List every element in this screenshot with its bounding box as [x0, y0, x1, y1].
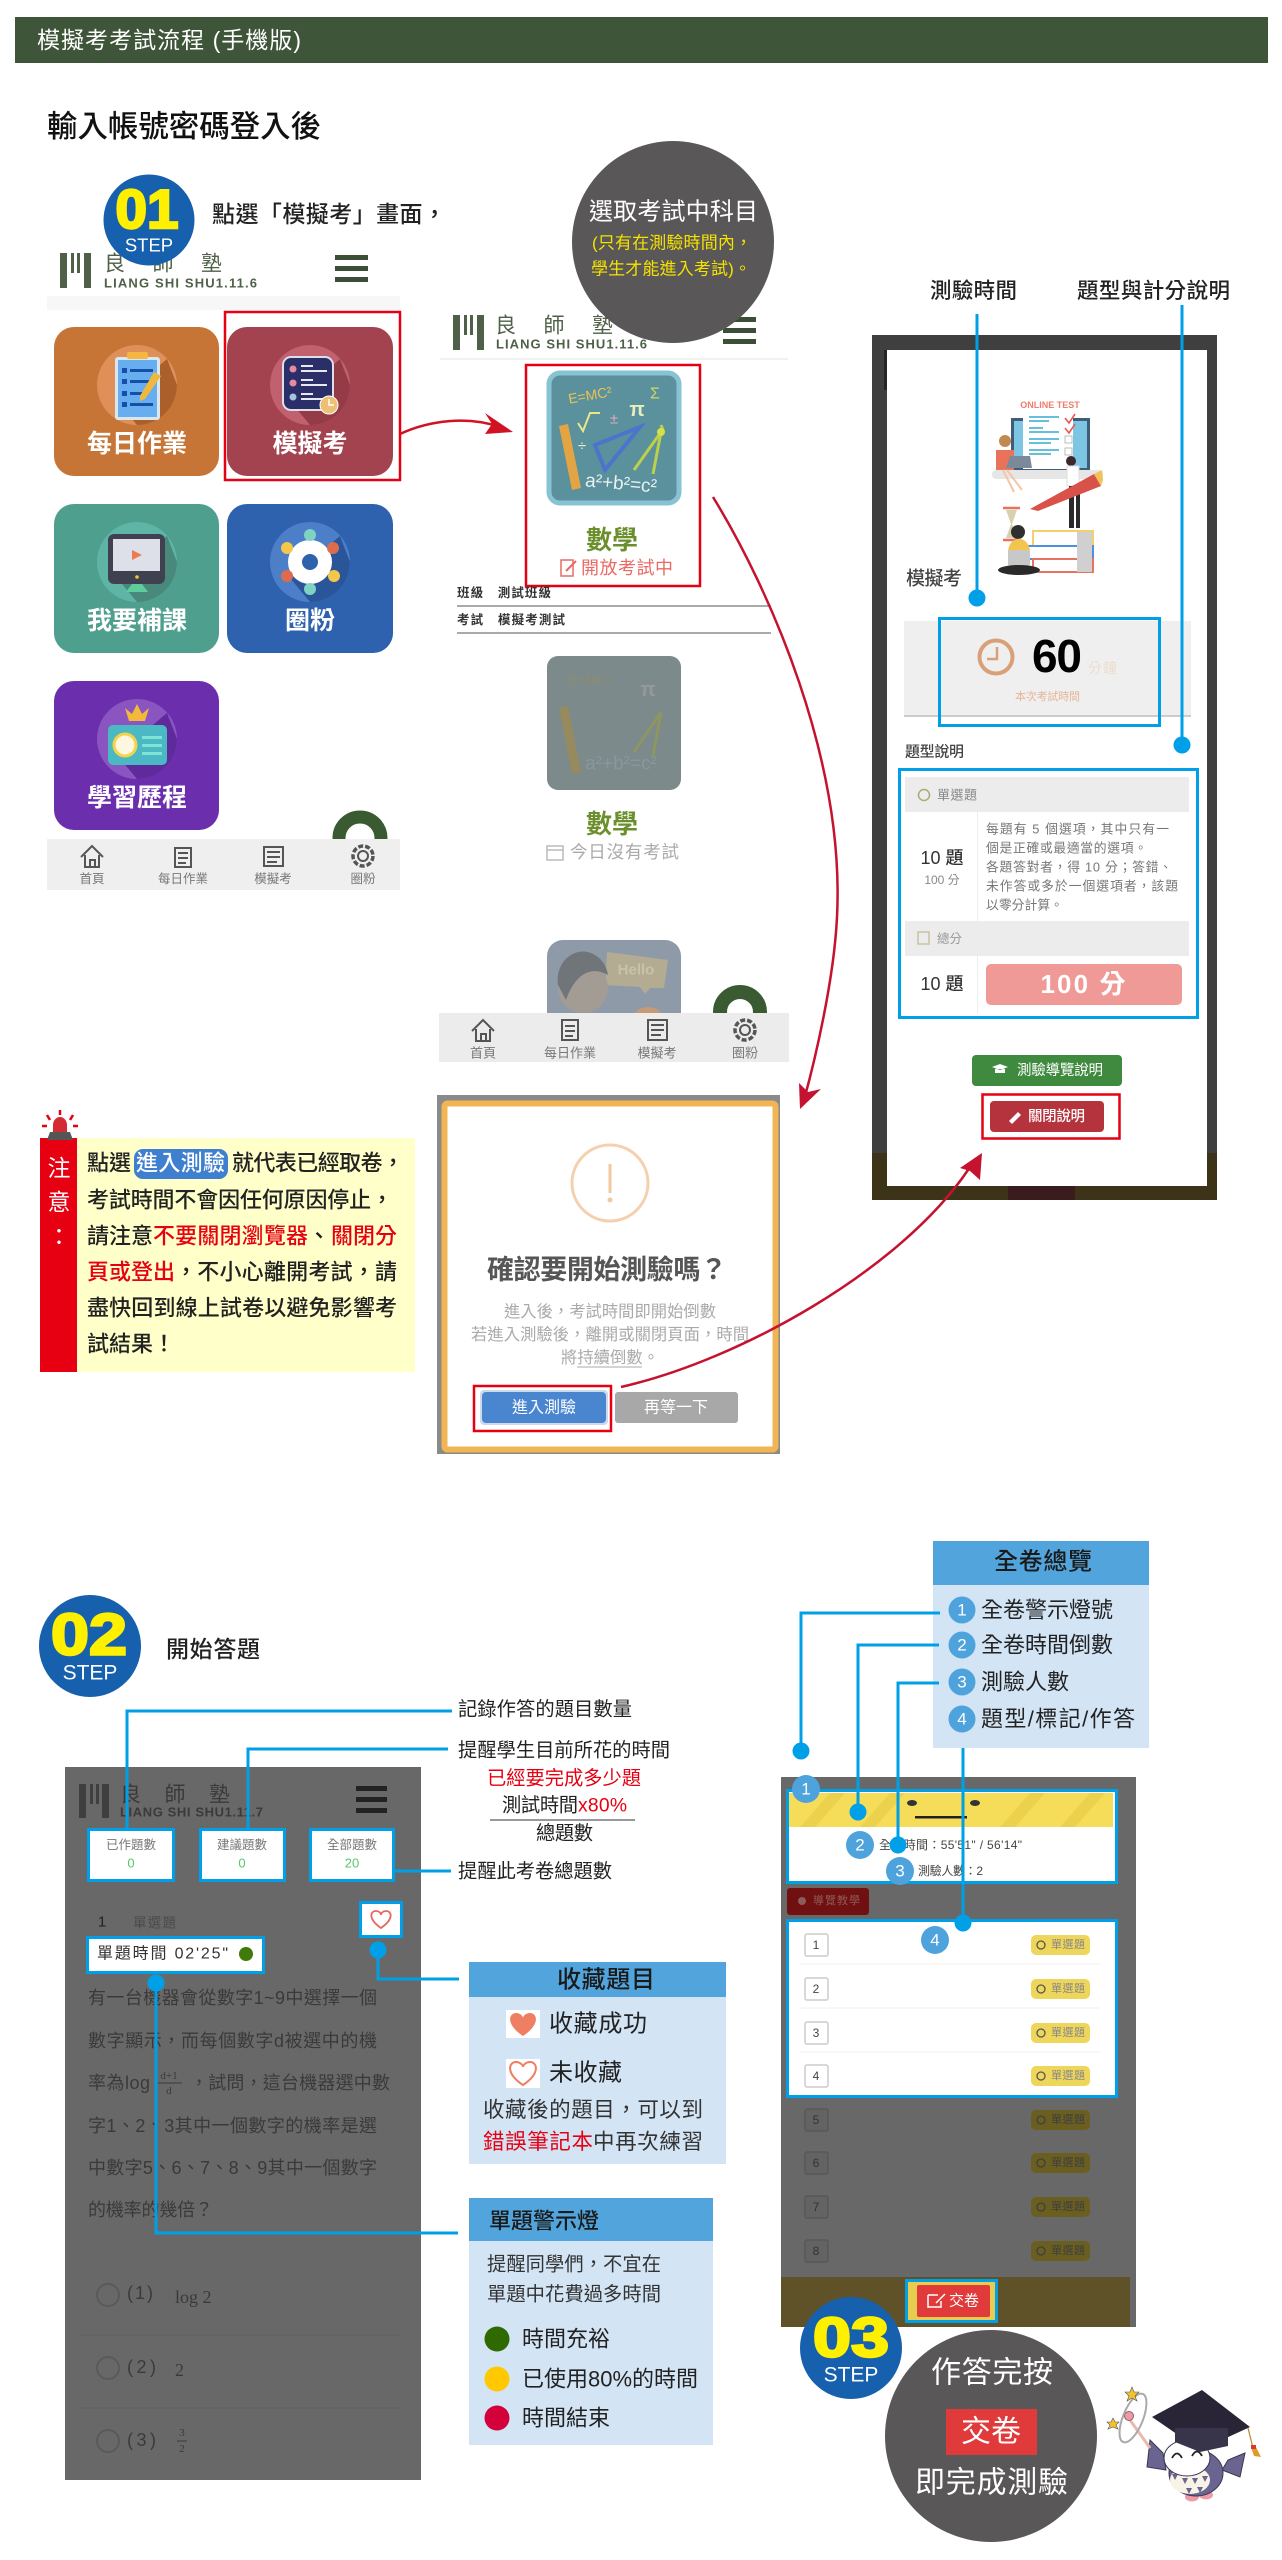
screen: exam description	[872, 335, 1217, 1200]
warning notice: 、	[308, 1224, 330, 1248]
marker 1: 1	[801, 1780, 811, 1798]
step badge 02: 02	[51, 1602, 127, 1668]
warning notice: 注	[48, 1155, 70, 1181]
question list: dimmed rows: 8	[813, 2244, 820, 2258]
legend item 1: 全卷警示燈號	[981, 1598, 1113, 1622]
tile: circle fans	[227, 504, 393, 653]
marker 4: 4	[930, 1930, 940, 1950]
illustration: online test	[992, 400, 1103, 575]
exam info rows: 考試 模擬考測試	[457, 612, 565, 627]
panel: question warning light: 單題警示燈	[489, 2208, 599, 2234]
warning notice: 考試時間不會因任何原因停止，	[87, 1188, 393, 1212]
table: question types and scoring: 100 分	[1040, 969, 1126, 999]
question text: d+1	[160, 2070, 178, 2082]
callout: select subject: (只有在測驗時間內，	[592, 234, 752, 252]
step badge 02	[39, 1595, 141, 1697]
button: tour	[787, 1888, 869, 1915]
button: wait	[615, 1392, 738, 1423]
panel: favourite question: 中再次練習	[593, 2130, 703, 2154]
logo: home screen	[60, 252, 257, 290]
illustration: online test: ONLINE TEST	[1020, 400, 1080, 410]
warning notice: ：	[48, 1224, 70, 1250]
tile: open math exam: Σ	[650, 386, 660, 402]
highlight: open exam	[526, 365, 700, 586]
overview header: 測驗人數：2	[918, 1864, 983, 1878]
step badge 01	[104, 174, 194, 266]
tile: mock exam: 模擬考	[272, 430, 348, 458]
pointer: type mark answer	[954, 1748, 972, 1932]
counter: total	[310, 1830, 394, 1880]
marker 3	[886, 1857, 914, 1885]
table: question types and scoring	[905, 777, 1189, 1014]
warning notice: 意	[48, 1189, 70, 1215]
panel: question warning light: 單題中花費過多時間	[487, 2284, 661, 2306]
floating button: subject screen	[720, 992, 760, 1032]
button: enter test	[480, 1390, 608, 1425]
table: question types and scoring: 以零分計算。	[986, 898, 1063, 912]
legend item 3: 測驗人數	[981, 1670, 1069, 1694]
floating button: home screen	[339, 817, 381, 859]
arrow: mock exam to subject	[400, 413, 513, 434]
button: enter test: 進入測驗	[512, 1398, 576, 1416]
heading: after login: 輸入帳號密碼登入後	[47, 110, 321, 144]
tile: open math exam: a²+b²=c²	[584, 470, 658, 498]
tile: learning portfolio: 學習歷程	[87, 784, 187, 812]
tile: make-up lessons: 我要補課	[87, 607, 187, 635]
note: suggested count formula: 提醒學生目前所花的時間	[458, 1740, 670, 1762]
question number and type: 1	[98, 1914, 106, 1930]
callout: submit to finish: 即完成測驗	[915, 2466, 1068, 2500]
labels above exam description: 測驗時間	[930, 279, 1017, 303]
button: wait: 再等一下	[644, 1398, 708, 1416]
step badge 03: STEP	[824, 2364, 878, 2386]
question list: highlighted rows: 單選題	[1051, 2069, 1085, 2082]
warning notice: 盡快回到線上試卷以避免影響考	[87, 1296, 397, 1320]
counter: suggested: 0	[238, 1856, 246, 1870]
answer options: 2	[179, 2443, 185, 2455]
tile: open math exam: ±	[610, 410, 618, 428]
warning notice: 不要關閉瀏覽器	[153, 1224, 308, 1248]
bottom nav: home screen: 模擬考	[254, 872, 292, 886]
highlight: enter test	[474, 1386, 611, 1431]
pointer: answered count	[127, 1711, 452, 1828]
question list: dimmed rows: 單選題	[1051, 2244, 1085, 2257]
question text: 率為log	[88, 2073, 150, 2093]
note: suggested count formula: x80%	[578, 1796, 627, 1816]
bottom nav: home screen: 每日作業	[158, 871, 208, 886]
question list: dimmed rows: 6	[813, 2156, 820, 2170]
bottom bar	[781, 2277, 1130, 2327]
exam info rows	[457, 585, 771, 633]
card: test duration: 分鐘	[1088, 660, 1117, 676]
title bar: 模擬考考試流程 (手機版)	[37, 27, 301, 53]
table: question types and scoring: 每題有 5 個選項，其中只有一	[986, 822, 1169, 836]
question text	[88, 1988, 390, 2220]
tile: closed math exam: π	[640, 679, 656, 701]
logo: home screen: 良 師 塾	[104, 252, 222, 276]
question list: dimmed rows: 單選題	[1051, 2200, 1085, 2213]
question number and type: 單選題	[133, 1916, 176, 1930]
tile: daily homework: 每日作業	[87, 430, 187, 458]
counter: answered	[88, 1830, 174, 1880]
warning notice: 進入測驗	[136, 1150, 225, 1176]
labels above exam description: 題型與計分說明	[1077, 279, 1230, 303]
counter: total: 20	[345, 1856, 359, 1870]
warning notice: 關閉分	[331, 1224, 397, 1248]
step badge 03: 03	[813, 2306, 889, 2368]
question list: highlighted rows	[788, 1920, 1116, 2096]
panel: overview legend: 全卷總覽	[994, 1548, 1092, 1576]
panel: favourite question: 收藏題目	[557, 1966, 655, 1994]
warning notice	[40, 1110, 415, 1372]
pointer: paper warning lights	[792, 1613, 940, 1760]
label: math subject closed: 數學	[586, 809, 638, 839]
answer options: log 2	[175, 2287, 212, 2307]
answer options: (1)	[127, 2283, 153, 2303]
screen: paper overview	[781, 1777, 1136, 2327]
counter: answered: 0	[127, 1856, 135, 1870]
question list: highlighted rows: 單選題	[1051, 2026, 1085, 2039]
answer options	[80, 2283, 400, 2455]
panel: favourite question: 收藏後的題目，可以到	[483, 2098, 703, 2122]
step 1 instruction: 點選「模擬考」畫面，	[212, 201, 446, 227]
single question timer: 單題時間 02'25"	[97, 1944, 228, 1962]
panel: favourite question: 收藏成功	[549, 2010, 647, 2038]
callout: select subject	[572, 141, 774, 343]
table: question types and scoring: 個是正確或最適當的選項。	[986, 840, 1147, 856]
single question timer	[88, 1938, 264, 1972]
labels above exam description	[930, 279, 1230, 303]
table: question types and scoring: 單選題	[937, 788, 977, 802]
panel: question warning light: 提醒同學們，不宜在	[487, 2254, 661, 2276]
answer options: (2)	[127, 2357, 156, 2377]
legend item 4: 題型/標記/作答	[981, 1706, 1135, 1732]
question text: 數字顯示，而每個數字d被選中的機	[88, 2031, 377, 2051]
logo: subject screen: 良 師 塾	[495, 314, 613, 338]
bottom nav: home screen	[47, 839, 400, 890]
button: tour: 導覽教學	[813, 1893, 860, 1907]
logo: subject screen	[453, 314, 647, 352]
question text: 字1、2、3其中一個數字的機率是選	[88, 2116, 377, 2136]
label: exam open: 開放考試中	[581, 558, 673, 578]
icon: exclamation	[572, 1145, 648, 1221]
pointer: test duration	[968, 314, 986, 606]
note: suggested count formula: 總題數	[536, 1822, 593, 1844]
button: submit paper: 交卷	[949, 2292, 979, 2310]
pointer: favourite	[370, 1942, 459, 1979]
tile: english subject partial	[547, 940, 681, 1043]
question list: highlighted rows: 2	[813, 1982, 820, 1996]
label: no exam today: 今日沒有考試	[570, 842, 679, 862]
logo: home screen: LIANG SHI SHU1.11.6	[104, 276, 257, 290]
icon: hamburger menu	[723, 317, 756, 344]
callout: submit to finish: 作答完按	[931, 2356, 1053, 2390]
question list: highlighted rows: 1	[813, 1938, 820, 1952]
marker 3: 3	[895, 1862, 905, 1880]
logo: answering screen	[79, 1784, 263, 1820]
arrow: subject to confirm dialog	[713, 497, 838, 1109]
arrow: enter test to close button	[621, 1153, 982, 1387]
question number and type	[98, 1914, 176, 1930]
highlight: test duration	[940, 618, 1160, 726]
marker 2: 2	[855, 1836, 865, 1854]
panel: favourite question	[469, 1962, 726, 2164]
question list: dimmed rows: 單選題	[1051, 2113, 1085, 2126]
table: question types and scoring: 100 分	[924, 873, 960, 887]
button: close description	[990, 1101, 1104, 1132]
button: submit paper	[906, 2280, 996, 2322]
panel: favourite question: 未收藏	[549, 2060, 622, 2086]
icon: owl mascot	[1107, 2387, 1261, 2502]
counter: answered: 已作題數	[106, 1838, 156, 1852]
legend item 4: 4	[957, 1710, 967, 1728]
question list: highlighted rows: 單選題	[1051, 1938, 1085, 1951]
card: test duration	[904, 621, 1191, 717]
pointer: suggested count	[248, 1749, 448, 1828]
note: answered count: 記錄作答的題目數量	[458, 1698, 632, 1720]
dialog: confirm start: 將持續倒數。	[561, 1348, 659, 1367]
bottom nav: home screen: 首頁	[79, 872, 105, 886]
step badge 01: 01	[116, 178, 178, 240]
answer options: 3	[179, 2427, 185, 2439]
table: question types and scoring: 未作答或多於一個選項者，該題	[986, 878, 1178, 894]
legend item 1: 1	[957, 1600, 967, 1620]
dialog: confirm start: 進入後，考試時間即開始倒數	[504, 1303, 716, 1321]
bottom nav: subject screen: 每日作業	[544, 1046, 596, 1060]
counter: suggested: 建議題數	[217, 1838, 267, 1852]
button: exam tour: 測驗導覽說明	[1017, 1062, 1103, 1079]
pointer: question types	[1174, 305, 1190, 754]
callout: select subject: 選取考試中科目	[589, 198, 758, 226]
screen: answering	[65, 1767, 421, 2480]
highlight pill: enter test	[134, 1149, 228, 1179]
pointer: total count	[394, 1870, 451, 1872]
highlight: mock exam tile	[225, 312, 400, 480]
icon: siren	[42, 1110, 78, 1140]
table: question types and scoring: 各題答對者，得 10 分；答錯、	[986, 860, 1172, 874]
step badge 02: STEP	[63, 1662, 117, 1684]
question list: highlighted rows: 單選題	[1051, 1982, 1085, 1995]
bottom nav: subject screen: 首頁	[470, 1046, 496, 1060]
card: test duration: 本次考試時間	[1015, 689, 1080, 703]
tile: open math exam: ÷	[578, 438, 586, 454]
button: exam tour	[972, 1055, 1122, 1086]
label: math subject: 數學	[586, 525, 638, 555]
note: suggested count formula: 已經要完成多少題	[487, 1768, 641, 1790]
step badge 03	[800, 2297, 902, 2399]
bottom nav: subject screen	[439, 1013, 789, 1062]
warning notice: 點選	[87, 1150, 131, 1176]
tile: english subject partial: Hello	[618, 962, 654, 978]
icon: hamburger menu	[335, 255, 368, 282]
counter: total: 全部題數	[327, 1837, 377, 1852]
panel: favourite question: 錯誤筆記本	[483, 2130, 593, 2154]
icon: filled heart	[506, 2010, 540, 2038]
counter: suggested	[200, 1830, 284, 1880]
tile: make-up lessons	[54, 504, 219, 653]
tile: learning portfolio	[54, 681, 219, 830]
question list: dimmed rows: 5	[813, 2113, 820, 2127]
note: suggested count formula	[458, 1740, 670, 1844]
icon: hamburger menu	[356, 1786, 387, 1813]
legend item 3: 3	[957, 1672, 967, 1692]
legend item 3	[948, 1668, 1069, 1696]
tile: mock exam	[227, 327, 393, 476]
table: question types and scoring: 總分	[937, 931, 962, 946]
question list: dimmed rows	[805, 2109, 1090, 2262]
title bar	[15, 17, 1268, 63]
heading: question types: 題型說明	[905, 744, 964, 760]
favourite toggle	[360, 1902, 402, 1936]
question text: ，試問，這台機器選中數	[190, 2073, 390, 2093]
screen: subject selection	[439, 304, 789, 1062]
legend: plenty of time: 時間充裕	[522, 2326, 610, 2352]
bottom nav: home screen: 圈粉	[350, 872, 376, 886]
table: question types and scoring: 10 題	[920, 974, 964, 994]
answer options: (3)	[127, 2430, 156, 2450]
screen: app home menu	[47, 241, 400, 890]
heading: mock exam: 模擬考	[906, 568, 962, 590]
tile: closed math exam	[547, 656, 681, 790]
bottom nav: subject screen: 圈粉	[732, 1046, 758, 1060]
overview header	[788, 1791, 1117, 1881]
legend: time up: 時間結束	[522, 2406, 610, 2430]
tile: daily homework	[54, 327, 219, 476]
marker 2	[846, 1831, 874, 1859]
callout: submit to finish	[885, 2330, 1097, 2542]
answer options: 2	[175, 2360, 184, 2380]
tile: open math exam: E=MC²	[567, 383, 613, 407]
exam info rows: 班級 測試班級	[457, 585, 551, 600]
note: suggested count formula: 測試時間	[502, 1794, 578, 1816]
dialog: confirm start: 若進入測驗後，離開或關閉頁面，時間	[471, 1326, 749, 1344]
logo: answering screen: LIANG SHI SHU1.11.7	[120, 1804, 263, 1820]
callout: select subject: 學生才能進入考試)。	[591, 260, 751, 278]
tile: circle fans: 圈粉	[285, 607, 335, 635]
callout: submit to finish: 交卷	[961, 2416, 1021, 2448]
card: test duration: 60	[1032, 630, 1082, 682]
warning notice: 請注意	[87, 1224, 153, 1248]
legend: 80 percent used: 已使用80%的時間	[522, 2366, 698, 2392]
warning notice: ，不小心離開考試，請	[175, 1260, 397, 1284]
step badge 01: STEP	[125, 234, 173, 256]
button: close description: 關閉說明	[1028, 1108, 1085, 1125]
pointer: paper countdown	[850, 1645, 939, 1820]
question text: 的機率的幾倍？	[88, 2200, 213, 2220]
note: total count: 提醒此考卷總題數	[458, 1860, 612, 1882]
warning notice: 試結果！	[87, 1332, 175, 1356]
question text: 中數字5、6、7、8、9其中一個數字	[88, 2158, 377, 2178]
logo: answering screen: 良 師 塾	[120, 1784, 230, 1806]
question list: dimmed rows: 單選題	[1051, 2156, 1085, 2169]
tile: closed math exam: a²+b²=c²	[585, 754, 657, 774]
logo: subject screen: LIANG SHI SHU1.11.6	[496, 336, 647, 352]
highlight: question types	[900, 770, 1198, 1018]
tile: closed math exam: E=MC²	[568, 672, 612, 688]
step 2 instruction: 開始答題	[166, 1636, 260, 1662]
legend item 2: 全卷時間倒數	[981, 1632, 1113, 1658]
question list: highlighted rows: 4	[813, 2069, 820, 2083]
panel: overview legend	[933, 1541, 1149, 1748]
dialog: confirm start	[437, 1095, 780, 1454]
marker 4	[921, 1926, 949, 1954]
bottom nav: subject screen: 模擬考	[637, 1046, 677, 1060]
tile: open math exam	[549, 373, 679, 503]
highlight: close button	[982, 1094, 1120, 1138]
pointer: question timer	[148, 1974, 458, 2233]
warning notice: 就代表已經取卷，	[232, 1150, 404, 1176]
pointer: participant count	[890, 1683, 939, 1854]
overview header: 全卷時間：55'51" / 56'14"	[879, 1837, 1022, 1852]
marker 1	[792, 1775, 820, 1803]
question list: dimmed rows: 7	[813, 2200, 820, 2214]
icon: outline heart	[506, 2059, 540, 2088]
table: question types and scoring: 10 題	[920, 848, 964, 868]
tile: open math exam: π	[629, 399, 645, 421]
warning notice: 頁或登出	[87, 1260, 175, 1284]
legend item 2: 2	[957, 1636, 967, 1654]
question text: 有一台機器會從數字1~9中選擇一個	[88, 1988, 377, 2008]
panel: question warning light	[469, 2198, 713, 2445]
question list: highlighted rows: 3	[813, 2026, 820, 2040]
question text: d	[166, 2085, 172, 2097]
dialog: confirm start: 確認要開始測驗嗎？	[487, 1254, 727, 1285]
